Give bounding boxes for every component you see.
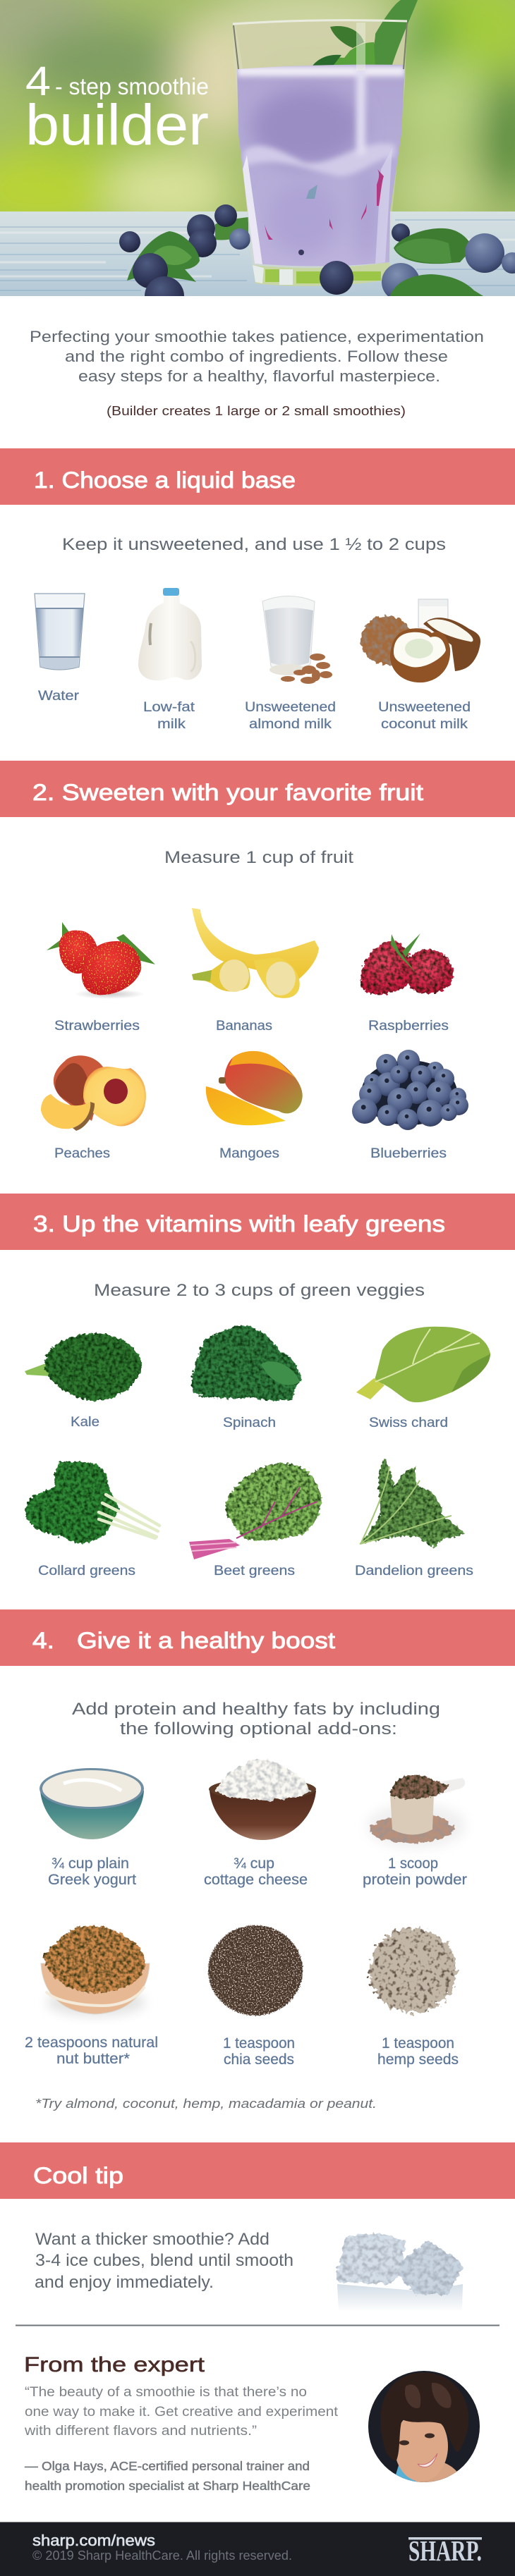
item: hemp seeds — [369, 1928, 459, 2068]
serving note: (Builder creates 1 large or 2 small smoothies) — [107, 404, 406, 418]
step 4 banner — [0, 1609, 515, 1666]
title — [25, 59, 209, 157]
step 3 banner — [0, 1194, 515, 1250]
step 2 panel — [0, 761, 515, 1161]
expert attribution: — Olga Hays, ACE-certified personal trainer and — [25, 2459, 310, 2473]
item: peaches: Peaches — [54, 1146, 110, 1161]
wooden table — [0, 211, 515, 296]
item: chia seeds: 1 teaspoon — [223, 2035, 295, 2051]
icon: cottage cheese bowl — [209, 1759, 316, 1840]
item: blueberries: Blueberries — [370, 1146, 447, 1161]
cool tip text — [35, 2230, 293, 2292]
step 1 panel — [0, 448, 515, 732]
icon: collard greens — [25, 1461, 159, 1543]
icon: swiss chard — [356, 1327, 490, 1402]
step 3 instruction: Measure 2 to 3 cups of green veggies — [94, 1281, 425, 1300]
icon: yogurt bowl — [40, 1768, 144, 1839]
step 4 instruction: the following optional add-ons: — [120, 1719, 397, 1738]
item: bananas: Bananas — [216, 1019, 272, 1034]
item: dandelion greens: Dandelion greens — [355, 1564, 473, 1578]
cool tip text: Want a thicker smoothie? Add — [35, 2230, 269, 2249]
step 1 banner: 1. Choose a liquid base — [34, 467, 296, 493]
copyright: © 2019 Sharp HealthCare. All rights reserved. — [32, 2549, 292, 2563]
mint sprig — [310, 0, 418, 68]
item: water: Water — [38, 689, 80, 704]
intro text: Perfecting your smoothie takes patience, experimentation — [30, 328, 484, 345]
step 2 banner — [0, 761, 515, 817]
title: builder — [25, 93, 209, 157]
footer — [0, 2522, 515, 2576]
icon: coconuts and glass — [360, 599, 480, 682]
footnote: *Try almond, coconut, hemp, macadamia or peanut. — [35, 2097, 377, 2111]
item: bananas — [192, 908, 319, 1034]
icon: dandelion greens — [360, 1458, 464, 1547]
portrait of Olga Hays — [368, 2371, 481, 2489]
item: protein powder: 1 scoop — [388, 1856, 438, 1872]
item: nut butter — [25, 1925, 158, 2067]
title: 4 — [25, 59, 51, 104]
icon: blueberry cluster — [352, 1050, 468, 1130]
step 4 banner: 4. — [32, 1628, 54, 1653]
item: kale — [25, 1333, 142, 1430]
item: swiss chard — [356, 1327, 490, 1430]
left basil leaf — [127, 231, 200, 282]
icon: chia seeds — [208, 1925, 303, 2016]
item: mangoes — [206, 1051, 303, 1161]
expert quote: “The beauty of a smoothie is that there’s no — [25, 2385, 307, 2400]
cool tip text: and enjoy immediately. — [35, 2273, 214, 2292]
step 4 banner: Give it a healthy boost — [77, 1628, 335, 1653]
icon: strawberries — [47, 922, 155, 999]
foreground berries and leaves — [133, 228, 515, 296]
icon: peaches — [41, 1055, 146, 1131]
item: hemp seeds: 1 teaspoon — [382, 2035, 454, 2051]
footer link: sharp.com/news — [32, 2532, 155, 2549]
icon: hemp seeds — [369, 1928, 456, 2013]
item: collard greens: Collard greens — [38, 1564, 135, 1578]
berries and leaves behind glass — [119, 204, 410, 257]
item: beet greens — [189, 1463, 322, 1578]
step 4 instruction — [72, 1700, 440, 1738]
item: water — [35, 594, 85, 704]
expert panel — [24, 2353, 481, 2493]
item: raspberries — [361, 933, 453, 1034]
step 3 panel — [0, 1194, 515, 1578]
item: dandelion greens — [355, 1458, 473, 1578]
item: low-fat milk: milk — [157, 717, 186, 732]
icon: milk glass with almonds — [262, 596, 332, 684]
step 2 banner: 2. Sweeten with your favorite fruit — [32, 780, 423, 805]
item: nut butter: 2 teaspoons natural — [25, 2035, 158, 2051]
cool tip banner: Cool tip — [33, 2163, 123, 2188]
item: hemp seeds: hemp seeds — [377, 2051, 459, 2068]
item: mangoes: Mangoes — [219, 1146, 279, 1161]
item: unsweetened coconut milk: coconut milk — [381, 717, 468, 732]
item: low-fat milk: Low-fat — [143, 700, 195, 715]
icon: spinach — [192, 1325, 301, 1401]
item: spinach: Spinach — [223, 1416, 276, 1430]
step 1 instruction: Keep it unsweetened, and use 1 ½ to 2 cups — [62, 535, 446, 554]
icon: kale — [25, 1333, 142, 1401]
item: strawberries: Strawberries — [54, 1019, 140, 1034]
icon: glass of water — [35, 594, 85, 670]
hero photo: smoothie on table — [0, 0, 515, 316]
item: strawberries — [47, 922, 155, 1034]
expert quote: with different flavors and nutrients.” — [24, 2424, 257, 2439]
item: cottage cheese — [204, 1759, 316, 1888]
icon: mango — [206, 1051, 303, 1125]
expert attribution: health promotion specialist at Sharp HealthCare — [25, 2479, 310, 2493]
item: protein powder — [363, 1774, 467, 1888]
item: nut butter: nut butter* — [56, 2051, 130, 2067]
blurred garden background — [0, 0, 515, 233]
item: chia seeds: chia seeds — [224, 2051, 294, 2068]
step 2 instruction: Measure 1 cup of fruit — [164, 848, 353, 867]
icon: beet greens — [189, 1463, 322, 1559]
item: collard greens — [25, 1461, 159, 1578]
Sharp logo: SHARP. — [408, 2534, 482, 2567]
title: - step smoothie — [55, 73, 209, 99]
cool tip text: 3-4 ice cubes, blend until smooth — [35, 2251, 293, 2270]
item: greek yogurt — [40, 1768, 144, 1888]
icon: bowl of nut butter — [41, 1925, 150, 2016]
expert quote — [24, 2385, 339, 2439]
item: spinach — [192, 1325, 301, 1430]
item: beet greens: Beet greens — [214, 1564, 295, 1578]
step 4 instruction: Add protein and healthy fats by including — [72, 1700, 440, 1719]
expert quote: one way to make it. Get creative and experiment — [25, 2405, 339, 2419]
step 1 banner — [0, 448, 515, 505]
item: raspberries: Raspberries — [368, 1019, 449, 1034]
cool tip banner — [0, 2142, 515, 2199]
intro text: and the right combo of ingredients. Follow these — [65, 348, 448, 365]
expert heading: From the expert — [24, 2353, 205, 2376]
item: kale: Kale — [71, 1415, 99, 1430]
item: greek yogurt: ¾ cup plain — [52, 1856, 129, 1872]
item: swiss chard: Swiss chard — [369, 1416, 448, 1430]
intro text: easy steps for a healthy, flavorful masterpiece. — [78, 367, 440, 385]
expert attribution — [25, 2459, 310, 2493]
intro text — [30, 328, 484, 385]
icon: raspberries — [361, 933, 453, 994]
item: blueberries — [352, 1050, 468, 1161]
cool tip panel — [0, 2142, 515, 2312]
glass of smoothie — [233, 0, 418, 286]
icon: ice cubes — [336, 2233, 463, 2312]
item: unsweetened almond milk: Unsweetened — [245, 700, 336, 715]
item: greek yogurt: Greek yogurt — [48, 1872, 136, 1888]
icon: scoop of protein powder — [367, 1774, 466, 1848]
icon: banana with slices — [192, 908, 319, 998]
item: unsweetened almond milk: almond milk — [249, 717, 332, 732]
item: peaches — [41, 1055, 146, 1161]
step 3 banner: 3. Up the vitamins with leafy greens — [33, 1211, 445, 1237]
divider — [16, 2325, 499, 2326]
item: low-fat milk — [138, 588, 202, 732]
item: unsweetened coconut milk: Unsweetened — [378, 700, 471, 715]
item: protein powder: protein powder — [363, 1872, 467, 1888]
step 4 panel — [0, 1609, 515, 2111]
item: chia seeds — [208, 1925, 303, 2068]
item: unsweetened almond milk — [245, 596, 336, 732]
item: cottage cheese: ¾ cup — [234, 1856, 274, 1872]
glass base — [253, 262, 392, 286]
item: unsweetened coconut milk — [360, 599, 480, 732]
item: cottage cheese: cottage cheese — [204, 1872, 308, 1888]
icon: milk jug — [138, 588, 202, 680]
